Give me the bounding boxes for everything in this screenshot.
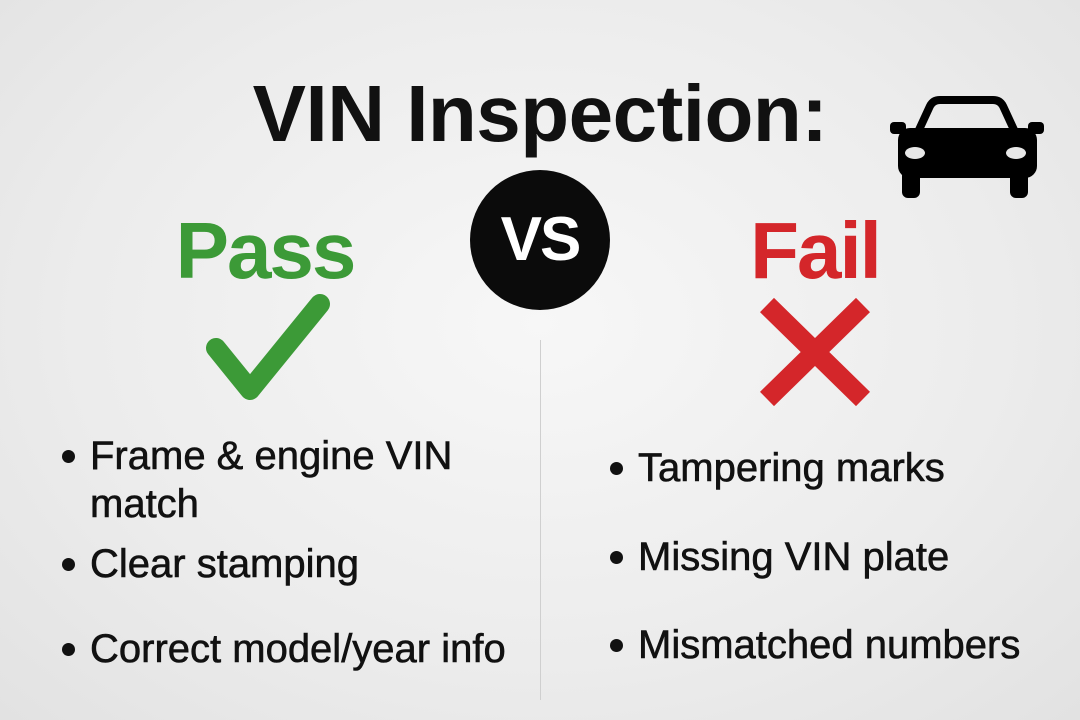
VS circle (470, 170, 610, 310)
VS circle: VS (501, 205, 579, 274)
list: fail (610, 446, 1020, 667)
bullet: tampering: Tampering marks (638, 446, 945, 490)
bullet: frame & engine: match (90, 482, 199, 526)
bullet: frame & engine: Frame & engine VIN (90, 434, 452, 478)
bullet: clear stamping: Clear stamping (90, 542, 359, 586)
bullet: correct model: Correct model/year info (90, 627, 506, 671)
bullet: frame & engine (90, 432, 452, 528)
icon: cross (760, 298, 870, 406)
title: VIN Inspection: (253, 69, 827, 158)
icon: checkmark (206, 294, 330, 400)
bullet: missing plate: Missing VIN plate (638, 535, 949, 579)
list: pass (62, 434, 506, 671)
divider (540, 340, 541, 700)
heading: Pass: Pass (176, 206, 354, 295)
icon: car (890, 96, 1044, 198)
heading: Fail: Fail (750, 206, 880, 295)
bullet: mismatched: Mismatched numbers (638, 623, 1020, 667)
